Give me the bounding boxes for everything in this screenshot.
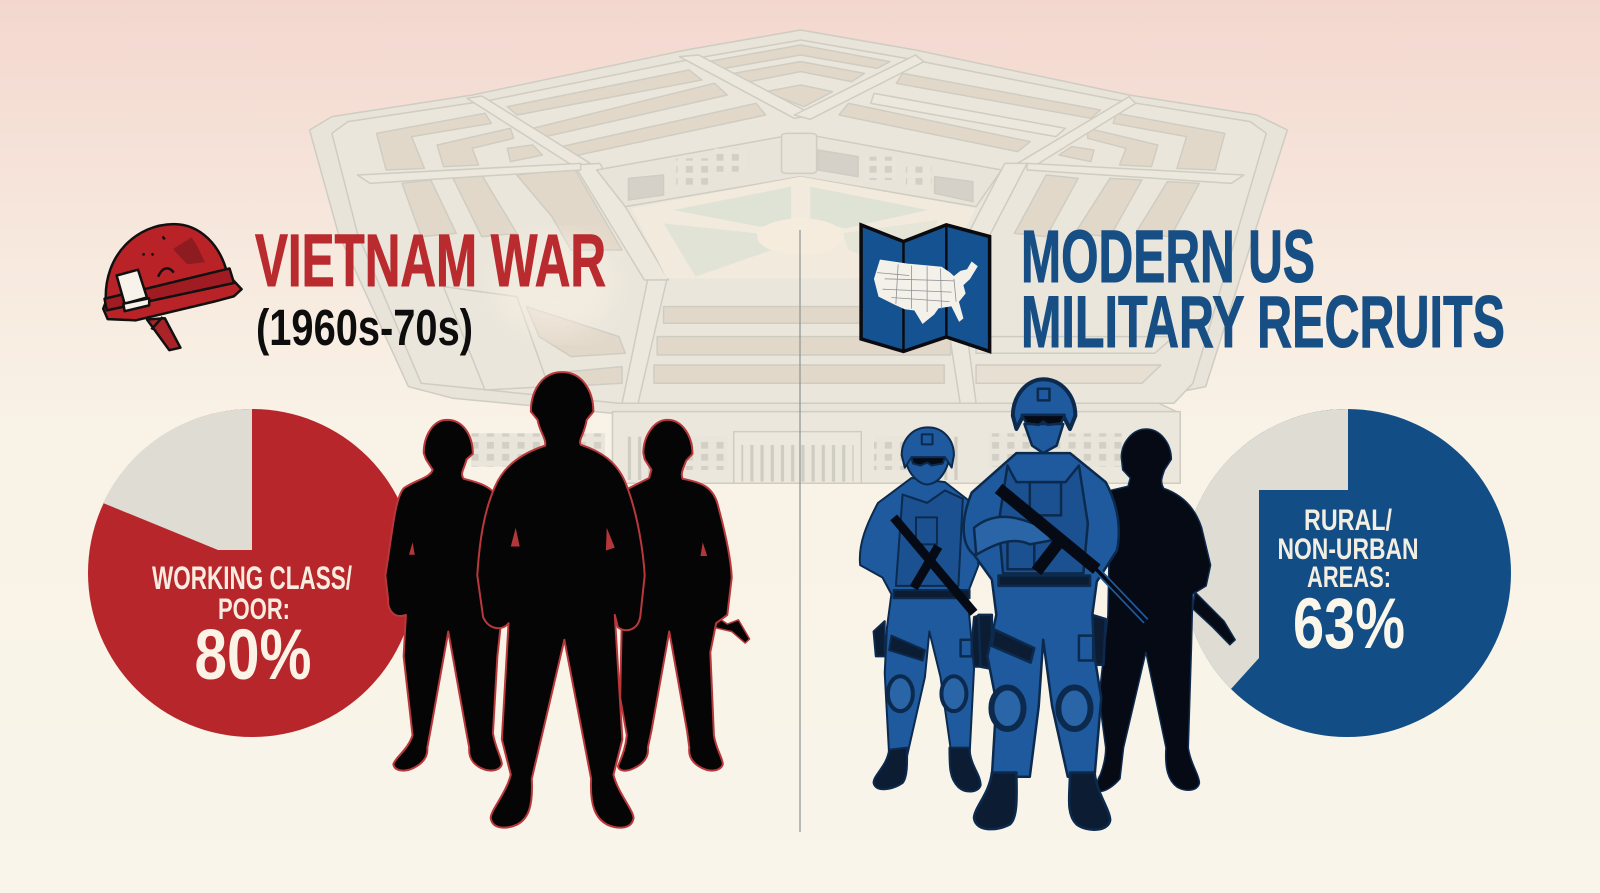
text glow behind Vietnam title xyxy=(495,235,615,335)
left soldier xyxy=(385,420,502,771)
pie label: RURAL/ xyxy=(1304,504,1393,537)
south wing base and facade xyxy=(613,412,1180,483)
rifle xyxy=(894,517,974,613)
illustration: faded Pentagon building xyxy=(310,30,1287,483)
left blue soldier xyxy=(860,427,992,792)
US outline xyxy=(874,260,977,323)
arm gaps xyxy=(409,528,707,556)
pie chart: working class 80% xyxy=(88,409,416,737)
upper left roofs xyxy=(507,70,702,115)
south wing roofs xyxy=(664,307,944,323)
pie chart: working class 80%: 80% xyxy=(194,616,312,695)
lower left and lower right roofs xyxy=(402,180,456,237)
black soldier xyxy=(1097,429,1235,791)
right wing roofs xyxy=(1113,113,1225,170)
right soldier xyxy=(618,420,732,771)
soldiers: blue figures xyxy=(860,379,1235,830)
pie chart: rural 63%: AREAS: xyxy=(1307,561,1391,594)
center blue soldier xyxy=(961,379,1146,830)
upper right roofs xyxy=(896,73,1100,118)
rifle xyxy=(707,598,750,643)
center divider xyxy=(799,230,801,832)
left wing roofs xyxy=(377,113,491,170)
top chevrons xyxy=(708,45,890,68)
icon: red helmet xyxy=(103,224,242,350)
pie chart: rural 63% xyxy=(1183,409,1511,737)
center soldier xyxy=(477,372,645,828)
pie chart: working class 80%: POOR: xyxy=(218,593,290,626)
pie chart: rural 63%: NON-URBAN xyxy=(1278,533,1418,566)
heading: Modern US Military Recruits: MODERN US xyxy=(1021,215,1315,298)
courtyard xyxy=(632,177,976,278)
spokes xyxy=(679,55,813,118)
pie label: WORKING CLASS/ xyxy=(152,560,352,596)
soldiers: black silhouettes xyxy=(385,372,750,828)
pie chart: rural 63%: 63% xyxy=(1293,585,1405,664)
panel: Vietnam War xyxy=(88,219,750,828)
panel: Modern US Military Recruits xyxy=(860,215,1511,830)
heading: Vietnam War: VIETNAM WAR xyxy=(255,219,606,302)
inner facade xyxy=(597,133,1002,207)
rifle xyxy=(1092,565,1146,621)
subheading: 1960s-70s: (1960s-70s) xyxy=(256,299,473,356)
icon: folded US map xyxy=(861,225,990,351)
